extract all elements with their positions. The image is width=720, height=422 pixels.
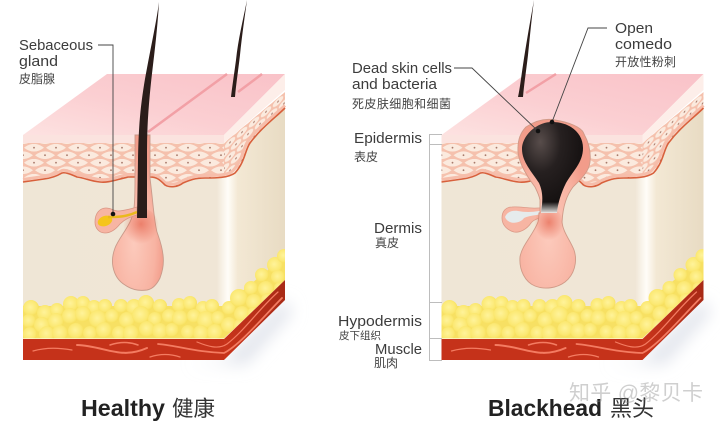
label: hypodermis: 皮下组织 [339, 329, 381, 342]
label: sebaceous gland: 皮脂腺 [19, 71, 55, 86]
skin creases [148, 74, 262, 132]
scale bracket [430, 134, 442, 360]
title: blackhead [488, 395, 654, 421]
hair follicle [112, 135, 163, 290]
panel: blackhead skin block [440, 0, 710, 364]
epidermis cells [23, 90, 285, 187]
label: dead skin cells [352, 60, 452, 111]
label: dermis [374, 220, 422, 250]
leader: open comedo [550, 28, 607, 124]
epidermis cells [442, 90, 704, 187]
hair [518, 0, 534, 97]
skin surface [23, 74, 285, 135]
main hair [137, 2, 159, 218]
label: sebaceous gland: Sebaceous [19, 37, 93, 54]
label: dermis: 真皮 [375, 236, 399, 250]
label: open comedo: Open [615, 20, 653, 37]
sebaceous gland, clogged [502, 207, 552, 232]
title: blackhead: Blackhead [488, 395, 602, 421]
title: blackhead: 黑头 [610, 396, 654, 421]
leader: dead skin cells [454, 68, 540, 133]
title: healthy: 健康 [172, 397, 215, 421]
label: dead skin cells: Dead skin cells [352, 60, 452, 77]
dermis layer [442, 95, 704, 325]
label: open comedo: 开放性粉刺 [615, 54, 676, 69]
label: epidermis: 表皮 [354, 150, 378, 164]
label: hypodermis [338, 313, 422, 342]
fat layer [22, 249, 291, 342]
label: muscle: Muscle [375, 341, 422, 358]
label: dead skin cells: 死皮肤细胞和细菌 [352, 96, 451, 111]
blackhead plug [522, 122, 583, 212]
label: open comedo: comedo [615, 36, 672, 53]
label: muscle [374, 341, 422, 370]
label: epidermis: Epidermis [354, 130, 422, 147]
label: muscle: 肌肉 [374, 356, 398, 370]
plug fading to white [541, 202, 559, 213]
cast shadow [608, 300, 710, 364]
pale skin edge [23, 74, 285, 143]
label: hypodermis: Hypodermis [338, 313, 422, 330]
dermis layer [23, 95, 285, 325]
follicle inner red [123, 208, 159, 248]
muscle layer [23, 280, 285, 360]
comedo sheath and bulb [518, 119, 590, 288]
label: open comedo [615, 20, 676, 69]
second hair [231, 0, 247, 97]
bulb inner red [534, 208, 564, 244]
title: healthy [81, 395, 215, 421]
leader: sebaceous gland [98, 45, 115, 216]
label: epidermis [354, 130, 422, 164]
skin crease [526, 74, 556, 93]
panel: healthy skin block [22, 0, 292, 364]
watermark: 知乎 @黎贝卡 [569, 382, 703, 405]
skin surface [442, 74, 704, 135]
title: healthy: Healthy [81, 395, 165, 421]
label: dermis: Dermis [374, 220, 422, 237]
cast shadow [190, 300, 292, 364]
fat layer [440, 249, 710, 342]
pale skin edge [442, 74, 704, 143]
label: sebaceous gland [19, 37, 93, 86]
muscle layer [442, 280, 704, 360]
sebaceous gland [95, 207, 137, 233]
label: sebaceous gland: gland [19, 53, 58, 70]
label: dead skin cells: and bacteria [352, 76, 438, 93]
